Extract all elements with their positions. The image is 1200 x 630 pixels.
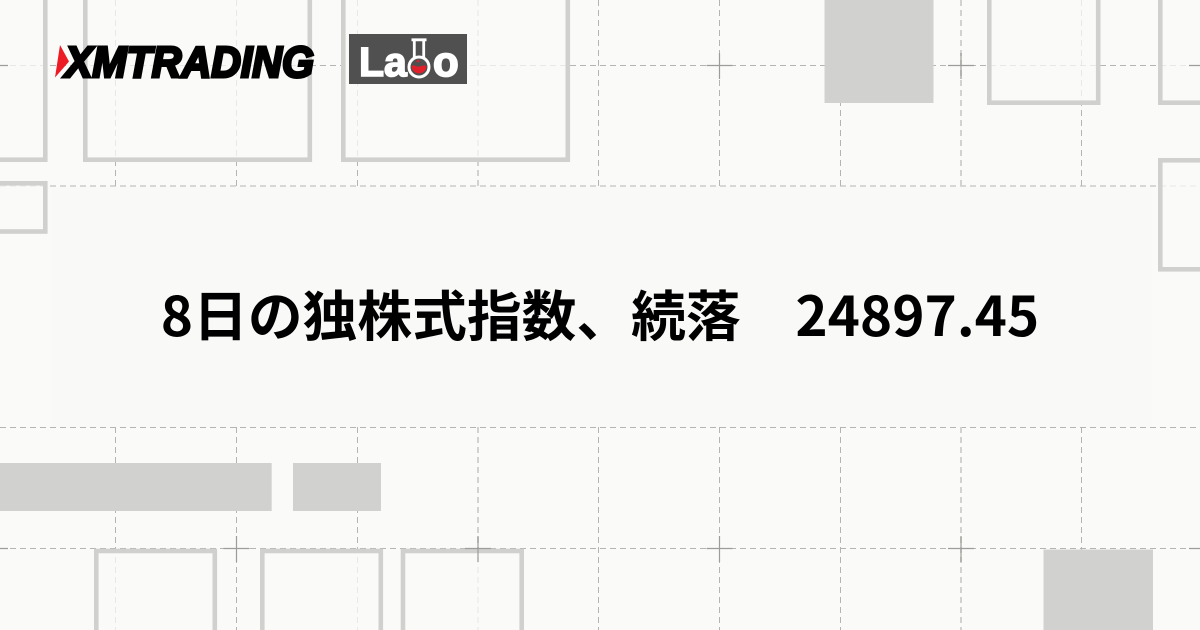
frames: top row — [0, 0, 1200, 269]
logo: Labo: o — [433, 38, 459, 84]
title: 8日の独株式指数、続落 24897.45 — [161, 272, 1039, 352]
logo: Labo: La — [359, 39, 408, 84]
frames: bottom row — [96, 551, 522, 630]
logo: Labo — [349, 34, 467, 84]
